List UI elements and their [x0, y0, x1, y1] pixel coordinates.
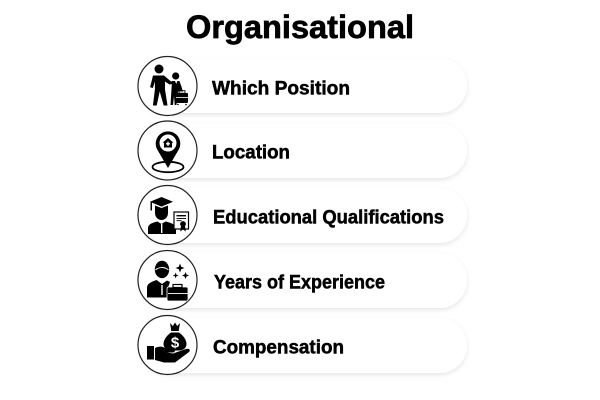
title: Organisational: [186, 9, 414, 45]
icon: map pin with house: [152, 131, 184, 172]
row: Location: [138, 121, 467, 180]
label: Educational Qualifications: [213, 206, 444, 228]
label: Which Position: [212, 78, 350, 100]
icon: professional with briefcase and sparkles: [147, 261, 189, 301]
row: Which Position: [138, 56, 467, 116]
label: Years of Experience: [214, 272, 385, 294]
row: Compensation: [138, 316, 467, 374]
dollar sign: $: [171, 334, 180, 352]
icon: hand holding money bag: [147, 322, 190, 362]
label: Location: [212, 142, 290, 164]
row: Years of Experience: [138, 250, 467, 310]
icon: two people with briefcase: [150, 64, 188, 106]
row: Educational Qualifications: [138, 186, 467, 244]
icon: graduate with certificate: [148, 197, 188, 234]
label: Compensation: [213, 336, 344, 358]
